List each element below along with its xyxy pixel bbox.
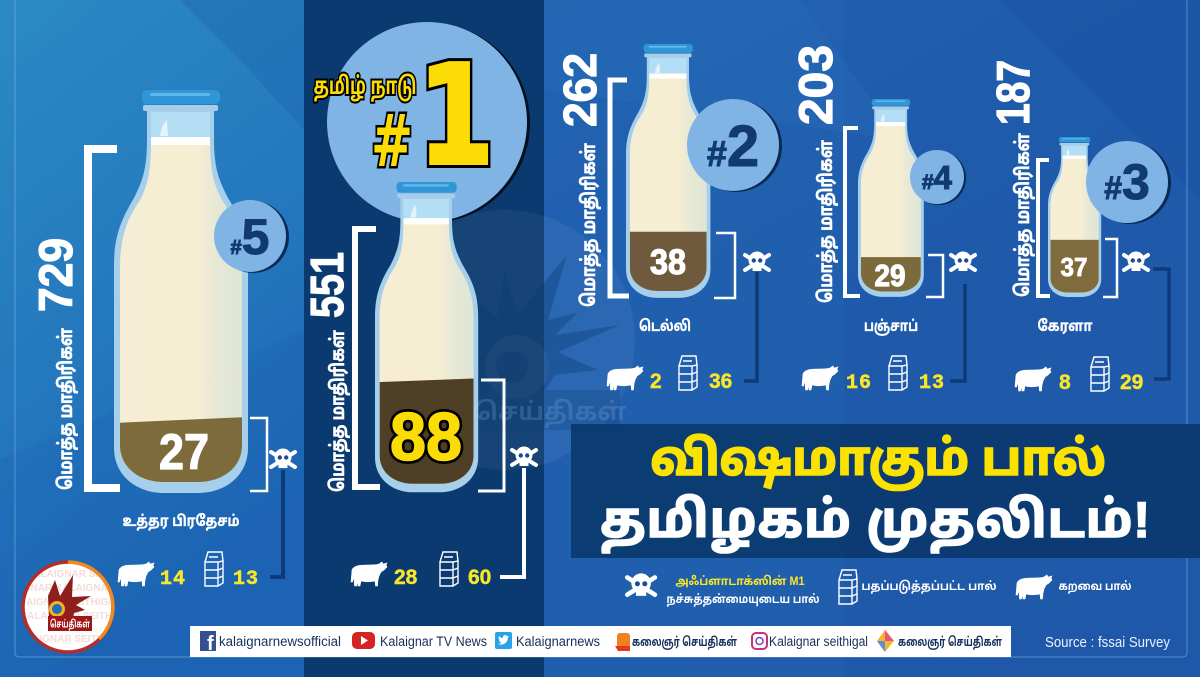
value: toxic count: 27 xyxy=(159,424,209,480)
legend label: aflatoxin: அஃப்ளாடாக்ஸின் M1 xyxy=(676,574,805,588)
icon: app xyxy=(615,633,630,651)
value: processed milk: 36 xyxy=(709,370,732,393)
value: processed milk: 13 xyxy=(919,372,945,395)
legend icon: carton xyxy=(839,570,857,604)
icon: cow xyxy=(802,366,838,390)
bracket: total samples xyxy=(355,229,380,487)
badge: rank 5 xyxy=(214,200,289,273)
bottle: Punjab xyxy=(858,99,924,297)
icon: facebook xyxy=(200,631,216,655)
connector line xyxy=(950,284,965,381)
icon: carton xyxy=(440,552,458,586)
label: state: கேரளா xyxy=(1038,318,1093,335)
label: total samples: மொத்த மாதிரிகள் xyxy=(1012,133,1035,297)
bracket: toxic samples xyxy=(926,255,943,297)
icon: youtube xyxy=(352,632,375,649)
legend label: processed milk: பதப்படுத்தப்பட்ட பால் xyxy=(862,579,996,594)
logo: Kalaignar Seithigal xyxy=(21,560,115,654)
label: state: உத்தர பிரதேசம் xyxy=(122,513,240,531)
label: Tamil Nadu: தமிழ் நாடு xyxy=(314,73,416,102)
icon: twitter xyxy=(495,632,512,649)
legend label: raw milk: கறவை பால் xyxy=(1058,579,1132,594)
bracket: total samples xyxy=(88,149,120,488)
logo: Kalaignar Seithigal: KALAIGNAR SEITHIGAL xyxy=(20,611,136,622)
value: toxic count: 88 xyxy=(390,399,462,475)
value: processed milk: 13 xyxy=(233,568,259,591)
icon: instagram xyxy=(752,633,767,649)
label: total samples: மொத்த மாதிரிகள் xyxy=(815,140,838,303)
badge: rank 1 xyxy=(314,22,530,223)
icon: skull xyxy=(745,252,769,271)
label: total samples: மொத்த மாதிரிகள் xyxy=(327,330,350,492)
icon: carton xyxy=(889,356,907,390)
value: processed milk: 29 xyxy=(1120,371,1143,394)
badge: rank 5: #5 xyxy=(231,209,269,265)
handle: app: கலைஞர் செய்திகள் xyxy=(632,634,737,651)
bracket: total samples xyxy=(845,128,860,296)
hash sign: # xyxy=(371,99,413,183)
legend icon: cow xyxy=(1016,575,1052,599)
icon: carton xyxy=(205,552,223,586)
icon: skull xyxy=(271,448,295,468)
icon: facebook: f xyxy=(207,633,214,655)
badge: rank 4 xyxy=(910,150,966,205)
connector line xyxy=(1153,269,1169,379)
badge: rank 2: #2 xyxy=(707,114,759,179)
icon: carton xyxy=(679,356,697,390)
label: total samples: மொத்த மாதிரிகள் xyxy=(578,143,601,307)
value: toxic count: 37 xyxy=(1060,252,1088,282)
numeral 1: 1 xyxy=(418,37,494,196)
watermark: channel logo: செய்திகள் xyxy=(473,398,627,428)
watermark: channel logo xyxy=(375,210,635,470)
label: total samples: மொத்த மாதிரிகள் xyxy=(55,328,78,490)
panel: Tamil Nadu xyxy=(301,22,536,589)
logo: Kalaignar Seithigal: செய்திகள் xyxy=(50,618,90,630)
icon: cow xyxy=(607,366,643,390)
legend label: toxic milk: நச்சுத்தன்மையுடைய பால் xyxy=(666,592,820,607)
icon: skull xyxy=(512,446,536,466)
panel: Delhi xyxy=(554,44,782,393)
source: Source : fssai Survey xyxy=(1045,635,1171,651)
bottle: Delhi xyxy=(626,44,710,298)
badge: rank 3 xyxy=(1086,141,1171,224)
connector line xyxy=(744,272,757,381)
bottle: Kerala xyxy=(1048,137,1101,297)
bracket: toxic samples xyxy=(250,418,267,491)
icon: cow xyxy=(1015,367,1051,391)
legend icon: skull xyxy=(627,573,655,596)
value: toxic count: 88 xyxy=(390,399,462,475)
value: raw milk: 14 xyxy=(160,568,186,591)
value: raw milk: 8 xyxy=(1059,371,1071,394)
logo: Kalaignar Seithigal: LAIGNAR SEITHIGAL xyxy=(26,634,128,645)
value: total samples: 187 xyxy=(987,60,1039,125)
value: total samples: 551 xyxy=(301,252,353,318)
value: raw milk: 28 xyxy=(394,566,418,589)
icon: cow xyxy=(351,562,387,586)
value: processed milk: 60 xyxy=(468,566,491,589)
icon: skull xyxy=(1124,252,1148,271)
handle: twitter: Kalaignarnews xyxy=(516,634,600,649)
icon: cow xyxy=(118,562,154,586)
value: raw milk: 16 xyxy=(846,372,872,395)
handle: instagram: Kalaignar seithigal xyxy=(769,634,868,649)
bracket: toxic samples xyxy=(714,233,735,298)
handle: facebook: kalaignarnewsofficial xyxy=(219,634,341,649)
value: raw milk: 2 xyxy=(650,370,662,393)
logo: Kalaignar Seithigal: IGNAR KALAIGNAR SE xyxy=(20,583,131,594)
label: state: டெல்லி xyxy=(639,318,691,335)
title line 1: விஷமாகும் பால் xyxy=(650,433,1106,491)
logo: Kalaignar Seithigal: AIGNAR SEITHIGAL xyxy=(26,597,122,608)
handle: youtube: Kalaignar TV News xyxy=(380,634,487,649)
value: toxic count: 29 xyxy=(874,258,906,293)
handle: sharechat: கலைஞர் செய்திகள் xyxy=(898,634,1002,651)
logo: Kalaignar Seithigal: KALAIGNAR SEITHIGAL xyxy=(26,569,142,580)
badge: rank 2 xyxy=(687,99,782,192)
bracket: total samples xyxy=(610,80,629,296)
bracket: toxic samples xyxy=(478,380,504,491)
bracket: total samples xyxy=(1038,160,1050,296)
title line 2: தமிழகம் முதலிடம்! xyxy=(600,492,1150,553)
value: toxic count: 38 xyxy=(650,243,686,282)
badge: rank 3: #3 xyxy=(1104,154,1150,210)
connector line xyxy=(500,468,524,577)
label: state: பஞ்சாப் xyxy=(864,318,918,336)
bracket: toxic samples xyxy=(1103,239,1117,297)
panel: Uttar Pradesh xyxy=(29,90,295,591)
value: total samples: 203 xyxy=(789,45,842,125)
value: total samples: 729 xyxy=(29,238,82,312)
bottle: Uttar Pradesh xyxy=(114,90,248,493)
icon: skull xyxy=(951,252,975,271)
social bar xyxy=(190,626,1011,657)
title banner xyxy=(571,424,1200,558)
icon: carton xyxy=(1091,357,1109,391)
icon: sharechat xyxy=(877,630,894,652)
bottle: Tamil Nadu xyxy=(375,182,478,492)
value: total samples: 262 xyxy=(554,53,606,127)
panel: Punjab xyxy=(789,45,975,395)
badge: rank 4: #4 xyxy=(922,159,953,196)
panel: Kerala xyxy=(987,60,1171,394)
legend xyxy=(627,570,1132,607)
numeral 1: 1 xyxy=(418,37,494,196)
connector line xyxy=(270,470,283,577)
